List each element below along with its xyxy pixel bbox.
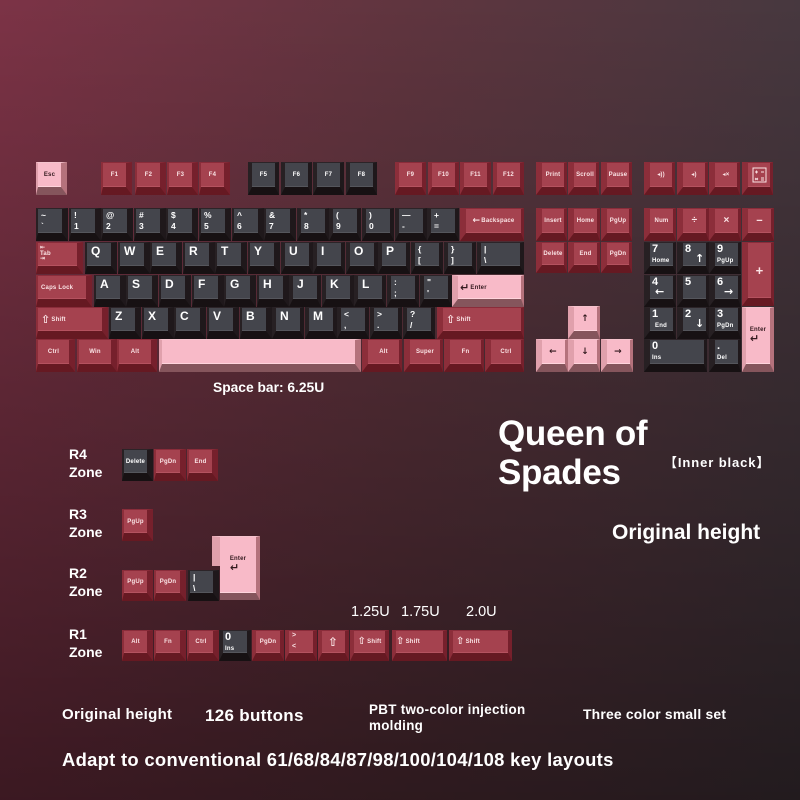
shift row: C [180,309,189,323]
function key row: ◂)) [657,172,665,178]
title: Spades [498,453,621,492]
numeric keypad: + [756,263,763,278]
feature: 126 buttons: 126 buttons [205,706,304,725]
numeric keypad: ↓ [695,317,704,330]
number row: 3 [139,221,144,231]
function key row: F12 [503,172,514,178]
number row: ~ [41,210,46,220]
size label 1.75U: 1.75U [401,604,440,620]
numeric keypad: − [756,214,763,226]
home row: D [165,277,174,291]
number row: = [434,221,439,231]
QWERTY row: P [386,244,394,258]
R3 zone keys: PgUp [127,518,144,524]
R1 zone label [69,626,102,660]
QWERTY row: W [124,244,136,258]
arrow keys: → [614,346,622,356]
R4 zone keys: End [195,458,206,464]
R2 zone keys: Enter [230,556,246,562]
function key row: ◂× [723,172,729,178]
QWERTY row: Y [254,244,262,258]
home row: ' [427,288,429,298]
R3 zone label: R3 [69,506,87,522]
shift row: < [344,309,349,319]
numeric keypad: 5 [685,276,691,288]
QWERTY row: | [484,244,487,254]
numeric keypad: 8 [685,243,691,255]
R2 zone keys: ↵ [230,561,239,574]
home row: S [132,277,140,291]
main key block [36,208,524,372]
navigation cluster: PgDn [610,251,626,257]
bottom row with space bar: Ctrl [500,349,512,355]
function key row: F7 [325,172,332,178]
home row: L [362,277,370,291]
numeric keypad: 1 [652,308,658,320]
number row: & [269,210,275,220]
numeric keypad: ↵ [750,332,759,345]
R1 zone keys [122,630,512,661]
QWERTY row: Tab [40,251,51,257]
R1 zone keys: > [292,632,296,639]
R2 zone keys: | [193,572,196,582]
home row: G [230,277,240,291]
navigation cluster: Insert [544,218,562,224]
QWERTY row: ] [451,255,454,265]
home row: : [394,277,397,287]
numeric keypad: 7 [652,243,658,255]
R2 zone label: R2 [69,565,87,581]
R1 zone keys: Ins [225,646,234,652]
R1 zone keys: ⇧ [328,635,338,649]
number row: 5 [204,221,209,231]
shift row: , [344,320,347,330]
feature: PBT two-color injection molding: molding [369,718,423,733]
numeric keypad: 2 [685,308,691,320]
feature: PBT two-color injection molding [369,702,525,733]
numeric keypad: ÷ [692,215,697,226]
R2 zone keys: \ [193,583,196,593]
R2 zone label: Zone [69,583,102,599]
number row: 7 [269,221,274,231]
function key row: Esc [44,172,55,178]
numeric keypad: Del [717,355,727,361]
bottom row with space bar: Fn [462,349,469,355]
numeric keypad: End [655,323,667,329]
numeric keypad: ↑ [695,252,704,265]
function key row: F3 [177,172,184,178]
R4 zone label: Zone [69,464,102,480]
R1 zone keys: Shift [406,639,420,645]
number row: 8 [304,221,309,231]
number row: $ [171,210,176,220]
size label 1.25U: 1.25U [351,604,390,620]
feature: three color small set: Three color small set [583,706,726,722]
home row: Caps Lock [41,284,73,290]
arrow keys: ↓ [581,346,589,356]
numeric keypad: Ins [652,355,661,361]
size label 2.0U: 2.0U [466,604,497,620]
numeric keypad: PgDn [717,323,733,329]
navigation cluster: PgUp [610,218,626,224]
numeric keypad: ← [655,285,664,298]
QWERTY row: U [289,244,298,258]
number row: — [402,210,411,220]
R1 zone keys: Shift [466,639,480,645]
heading: original height: Original height [612,521,760,544]
shift row: N [280,309,289,323]
function key row: F10 [438,172,449,178]
numeric keypad: . [717,340,720,352]
number row: 4 [171,221,176,231]
R1 zone keys: ⇧ [358,636,366,647]
shift row: M [313,309,323,323]
R1 zone label: R1 [69,626,87,642]
title [498,414,648,492]
navigation cluster [536,208,632,273]
R1 zone keys: ⇧ [396,636,405,647]
function key row: F5 [260,172,267,178]
QWERTY row: I [321,244,325,258]
number row: ^ [237,210,242,220]
numeric keypad: 3 [717,308,723,320]
bottom row with space bar: Alt [379,349,388,355]
bottom row with space bar: Ctrl [48,349,59,355]
function key row: Print [546,172,560,178]
number row: * [304,210,308,220]
shift row: X [148,309,156,323]
R3 zone label: Zone [69,524,102,540]
QWERTY row: T [221,244,229,258]
function key row: F9 [407,172,414,178]
shift row: B [246,309,255,323]
R1 zone keys: Fn [164,639,172,645]
R2 zone keys: PgDn [160,579,176,585]
bottom row with space bar [36,339,524,372]
QWERTY row: } [451,244,455,254]
home row: " [427,277,431,287]
QWERTY row: R [189,244,198,258]
bottom row with space bar: Alt [131,349,139,355]
R1 zone keys: PgDn [260,639,276,645]
QWERTY row: { [418,244,422,254]
arrow keys: ↑ [581,314,589,324]
numeric keypad: 4 [652,276,658,288]
home row: J [297,277,304,291]
numeric keypad: × [723,215,730,226]
navigation cluster: Home [577,218,594,224]
number row: ` [41,221,44,231]
R4 zone label [69,446,102,480]
number row: ! [74,210,77,220]
numeric keypad: 6 [717,276,723,288]
numeric keypad: Home [652,258,669,264]
R1 zone keys: ⇧ [456,636,465,647]
number row: Backspace [481,218,514,224]
home row: A [100,277,109,291]
function key row: F4 [209,172,216,178]
shift row: Shift [456,316,471,322]
R1 zone keys: 0 [225,631,231,643]
function key row: F11 [470,172,481,178]
shift row: V [213,309,221,323]
function key row: ◂) [691,172,697,178]
function key row: F6 [293,172,300,178]
numeric keypad: Num [655,218,668,224]
QWERTY row: [ [418,255,421,265]
R1 zone keys: Alt [131,639,140,645]
number row: @ [106,210,114,220]
navigation cluster: End [580,251,591,257]
number row: # [139,210,144,220]
number row: 1 [74,221,79,231]
R3 zone label [69,506,102,540]
numeric keypad: 9 [717,243,723,255]
shift row: ⇧ [446,313,455,326]
navigation cluster: Delete [543,251,563,257]
number row: ) [369,210,372,220]
QWERTY row [36,242,524,274]
home row: ↵ [460,281,469,294]
shift row: Shift [51,316,66,322]
shift row: / [410,320,413,330]
shift row [36,307,524,339]
R4 zone keys: PgDn [160,458,176,464]
R4 zone label: R4 [69,446,87,462]
function key row: F8 [358,172,365,178]
home row: ; [394,288,397,298]
space bar caption: Space bar: 6.25U [213,380,324,395]
numeric keypad: 0 [652,340,658,352]
function key row: F1 [111,172,118,178]
home row: H [263,277,272,291]
numeric keypad: PgUp [717,258,733,264]
shift row: > [377,309,382,319]
numeric keypad: Enter [750,327,766,333]
function key row: F2 [145,172,152,178]
home row [36,275,524,307]
function key row [36,162,773,195]
number row: 9 [336,221,341,231]
QWERTY row: ⇥ [40,256,45,262]
function key row: Pause [609,172,627,178]
layouts note: Adapt to conventional 61/68/84/87/98/100/104/108 key layouts [62,749,614,770]
home row: F [198,277,206,291]
R4 zone keys: Delete [126,458,145,464]
number row [36,208,524,241]
arrow keys [536,306,633,372]
home row: K [330,277,339,291]
number row: + [434,210,439,220]
QWERTY row: ⇤ [40,245,45,251]
R4 zone keys [122,449,218,481]
R1 zone keys: < [292,643,296,650]
shift row: . [377,320,380,330]
feature: original height: Original height [62,706,172,723]
number row: ← [473,216,480,226]
bottom row with space bar: Super [416,349,434,355]
home row: Enter [470,284,487,290]
shift row: Z [115,309,123,323]
QWERTY row: O [354,244,364,258]
number row: 0 [369,221,374,231]
R1 zone keys: Shift [367,639,381,645]
QWERTY row: \ [484,255,487,265]
R2 zone keys [122,536,260,601]
numeric keypad: → [724,285,733,298]
R2 zone keys: PgUp [127,579,144,585]
arrow keys: ← [549,346,557,356]
bottom row with space bar: Win [89,349,101,355]
number row: 2 [106,221,111,231]
number row: 6 [237,221,242,231]
numeric keypad [644,208,774,372]
number row: ( [336,210,339,220]
shift row: ? [410,309,415,319]
number row: % [204,210,212,220]
shift row: ⇧ [41,313,50,326]
function key row: Scroll [576,172,594,178]
R2 zone label [69,565,102,599]
R1 zone keys: Ctrl [195,639,207,645]
QWERTY row: Q [91,244,101,258]
subtitle: inner black: 【Inner black】 [664,455,770,470]
QWERTY row: E [156,244,164,258]
title: Queen of [498,414,647,453]
R1 zone label: Zone [69,644,102,660]
feature: PBT two-color injection molding: PBT two-color injection [369,702,525,717]
number row: - [402,221,405,231]
